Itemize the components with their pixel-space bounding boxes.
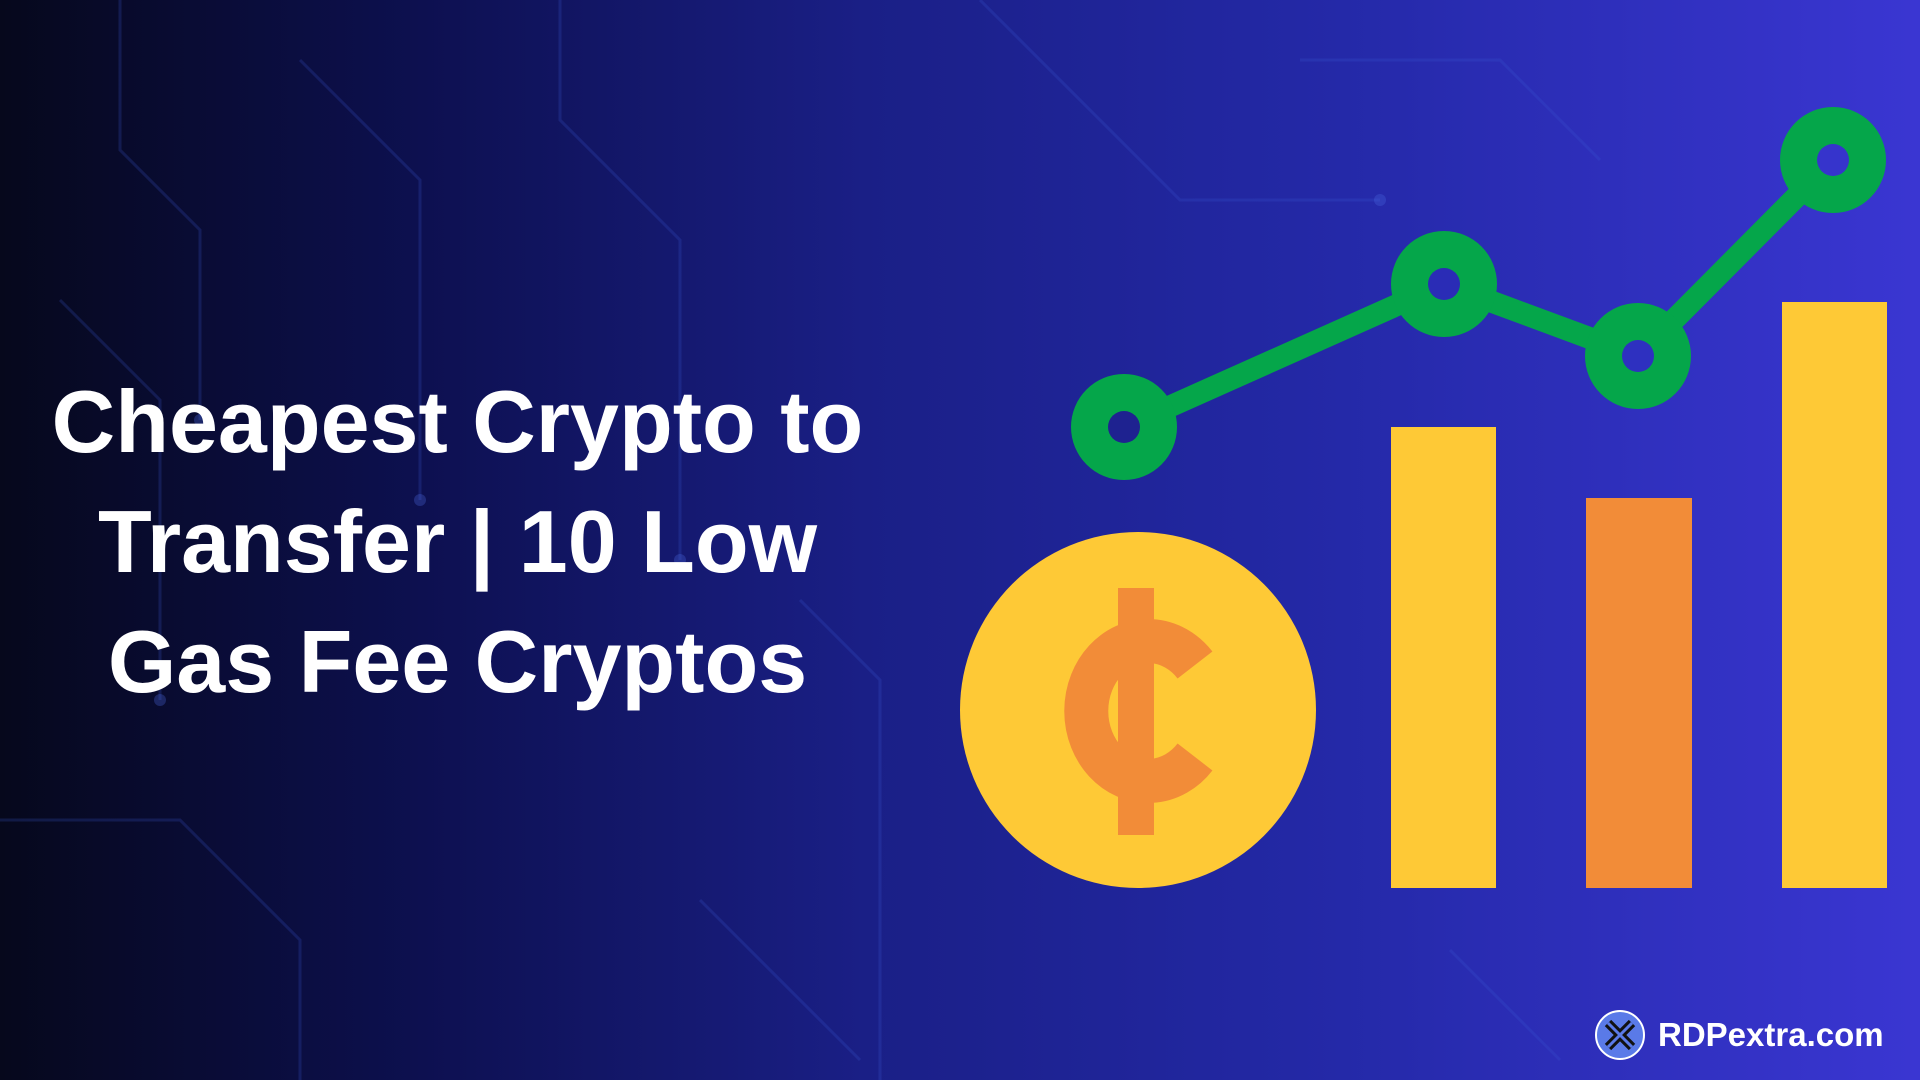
title: Cheapest Crypto to [52, 372, 863, 471]
bar 3 [1782, 302, 1887, 888]
logo [1595, 1010, 1884, 1060]
title: Gas Fee Cryptos [108, 612, 807, 711]
title: Transfer | 10 Low [98, 492, 817, 591]
icon: coin [960, 532, 1316, 888]
trend line [1071, 107, 1886, 480]
bar 1 [1391, 427, 1496, 888]
title [52, 372, 863, 711]
logo text: RDPextra.com [1658, 1016, 1884, 1053]
icon: logo mark [1595, 1010, 1645, 1060]
bar 2 [1586, 498, 1692, 888]
